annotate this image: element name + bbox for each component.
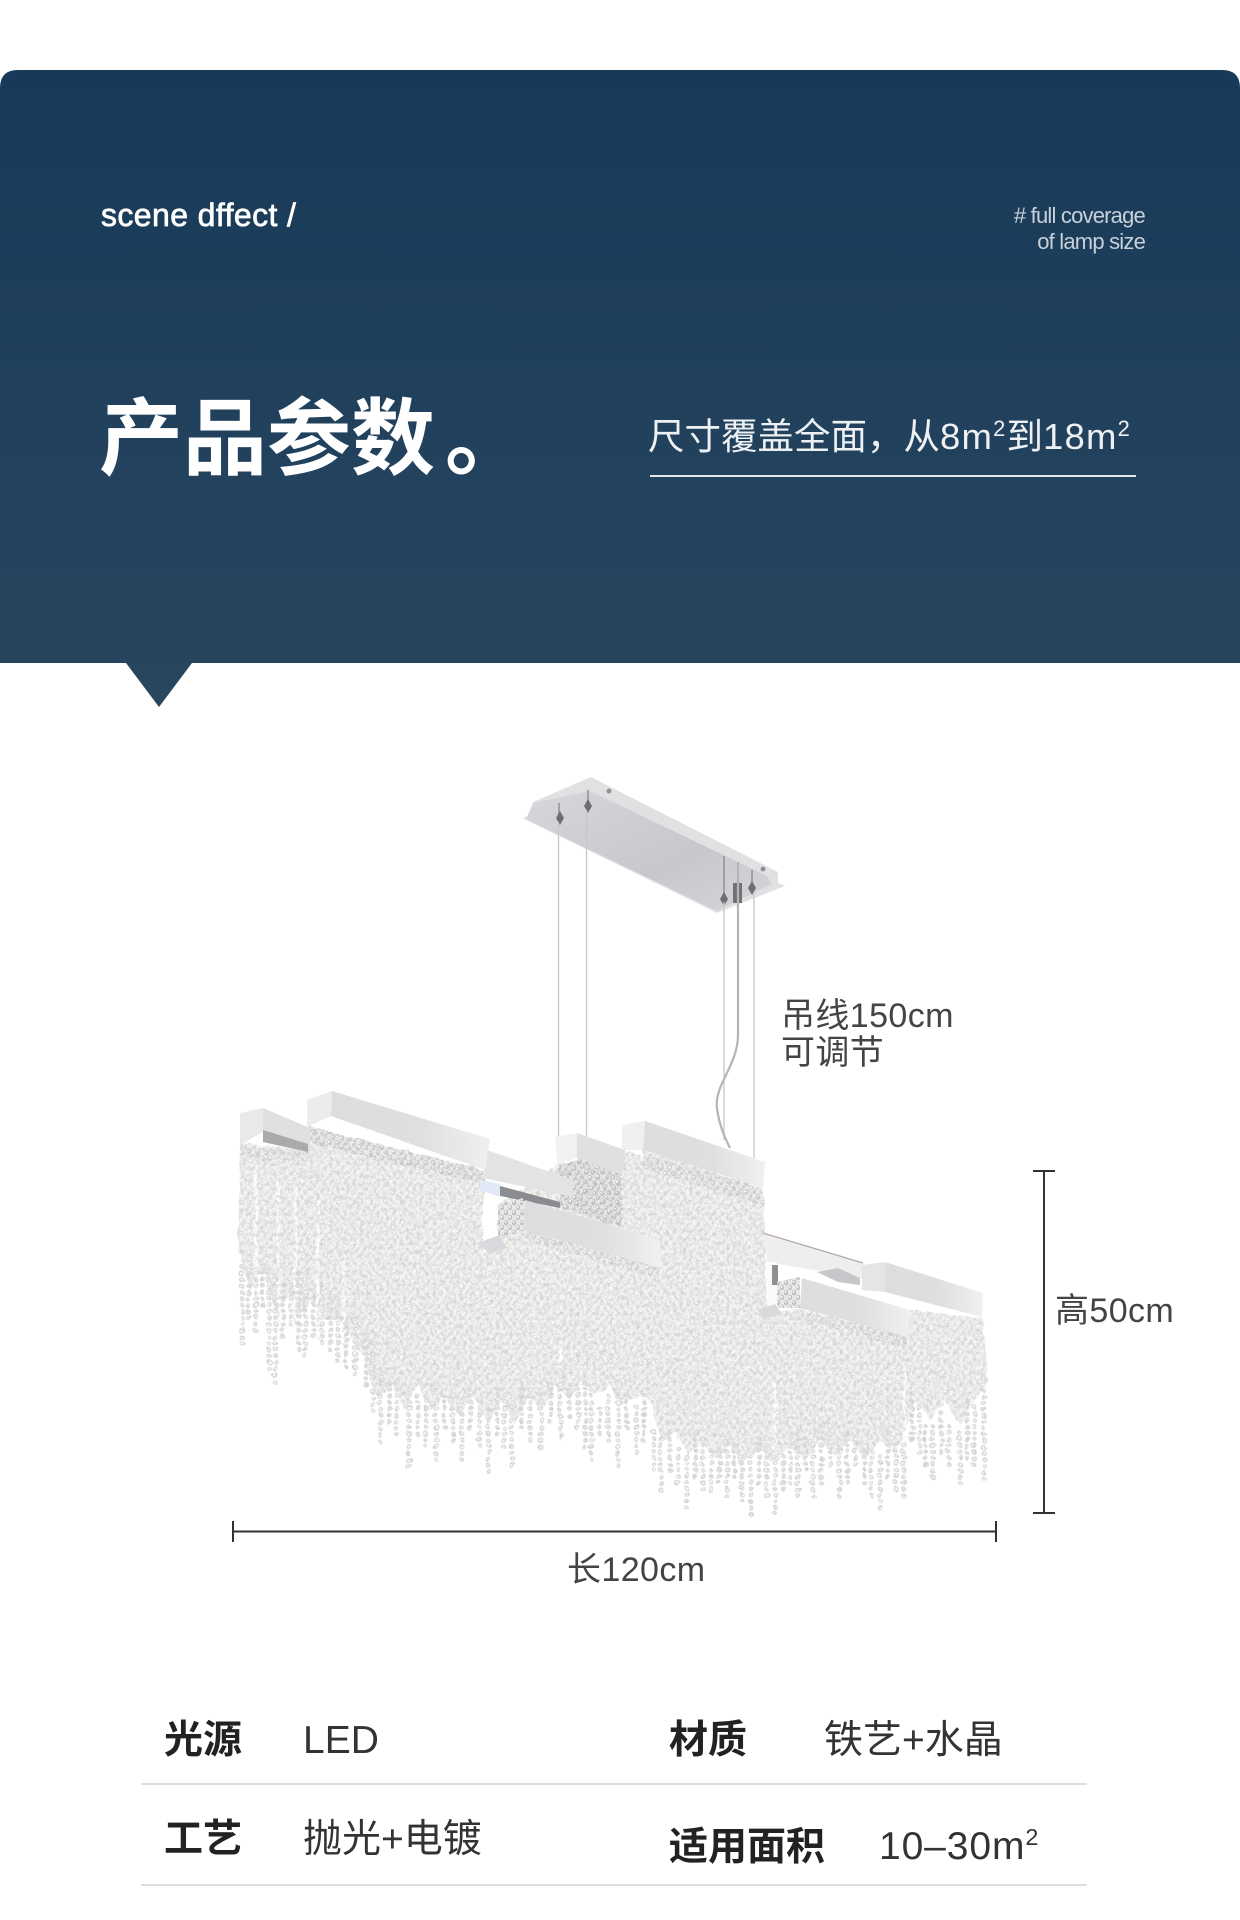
- darker crystal rows under the bars: [240, 1127, 908, 1348]
- row 1 material label: 材质: [669, 1719, 747, 1762]
- note: full coverage of lamp size: # full coverage: [1014, 203, 1145, 228]
- row 2 process value: 抛光+电镀: [303, 1818, 482, 1861]
- bar: far left: [240, 1108, 310, 1152]
- row 1 light source label: 光源: [164, 1719, 242, 1762]
- tagline: size coverage: 尺寸覆盖全面，从8m2到18m2: [648, 416, 1131, 457]
- dimension line: height: [1033, 1170, 1055, 1514]
- bar: long left: [307, 1091, 490, 1170]
- row 1 material value: 铁艺+水晶: [824, 1719, 1003, 1762]
- bar: lower right: [757, 1277, 910, 1337]
- label: adjustable: 可调节: [781, 1034, 884, 1072]
- heading: product parameters: 产品参数。: [99, 372, 529, 493]
- note: full coverage of lamp size: of lamp size: [1037, 229, 1145, 254]
- crystal curtain: [238, 1127, 988, 1517]
- bar: lower centre: [477, 1198, 662, 1268]
- subtitle: scene dffect: scene dffect /: [101, 197, 296, 233]
- bar: far right: [862, 1262, 983, 1317]
- tagline underline: [650, 475, 1136, 477]
- chrome bars: [240, 1091, 983, 1337]
- row 2 area value: 10–30m2: [879, 1824, 1039, 1868]
- label: cable length: 吊线150cm: [781, 997, 954, 1035]
- label: length: 长120cm: [567, 1551, 705, 1589]
- connector bar: right: [763, 1233, 863, 1308]
- connector bar: centre: [480, 1150, 573, 1208]
- spec table: [141, 1719, 1087, 1886]
- label: height: 高50cm: [1055, 1292, 1174, 1330]
- hanging crystal strands: [242, 1261, 984, 1517]
- white gaps between strands: [256, 1165, 905, 1480]
- row 2 area label: 适用面积: [669, 1826, 825, 1869]
- panel: header banner with pointer: [0, 70, 1240, 707]
- row dividers: [141, 1783, 1087, 1886]
- ceiling canopy: [522, 777, 785, 913]
- note: full coverage of lamp size: [1014, 203, 1145, 254]
- bar: small centre: [555, 1133, 625, 1175]
- row 2 process label: 工艺: [164, 1818, 242, 1861]
- row 1 light source value: LED: [303, 1719, 379, 1762]
- suspension wires and power cord: [558, 810, 754, 1165]
- dimension line: length: [232, 1521, 997, 1542]
- bar: upper centre: [622, 1121, 765, 1188]
